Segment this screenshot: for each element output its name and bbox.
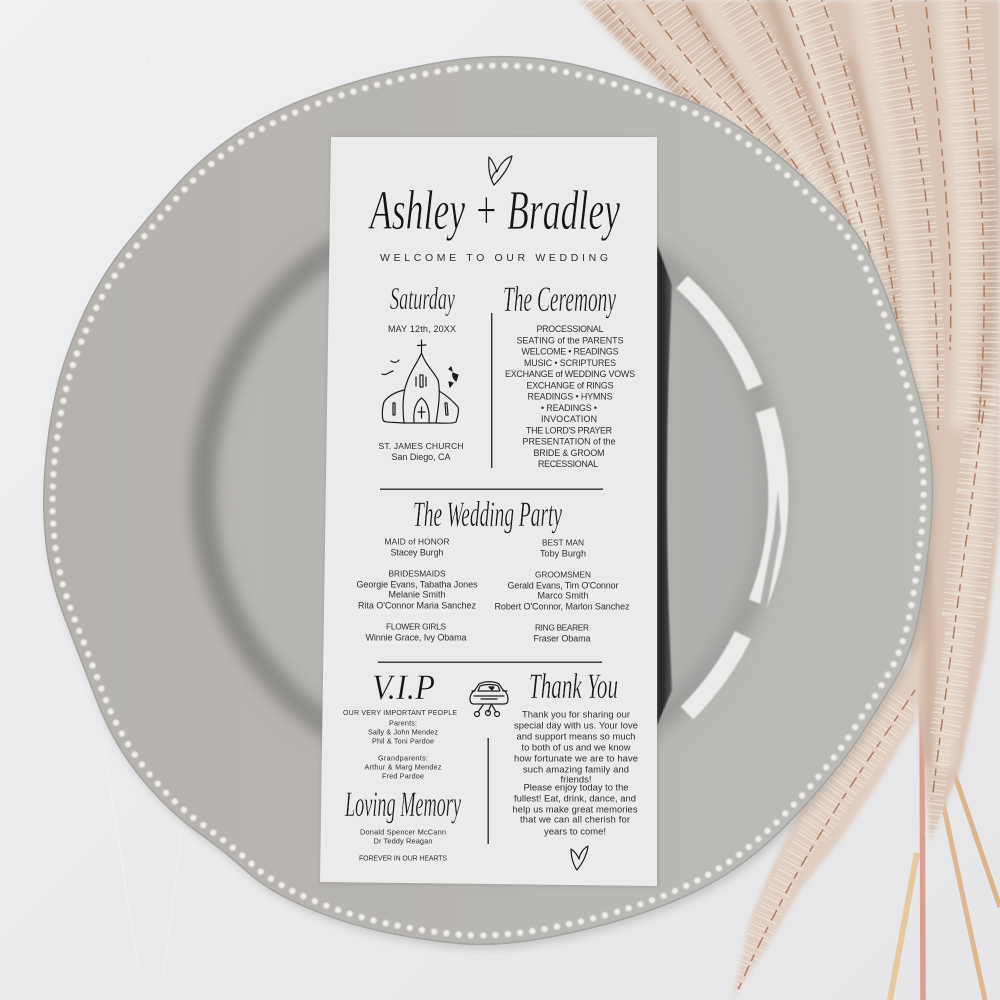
bride's party: FLOWER GIRLS bbox=[386, 622, 446, 632]
panel: date and venue: San Diego, CA bbox=[392, 452, 450, 462]
groom's party: BEST MAN bbox=[542, 538, 584, 548]
icon: wedding car bbox=[470, 682, 508, 716]
ceremony order list: MUSIC • SCRIPTURES bbox=[524, 358, 616, 368]
VIP names: Sally & John Mendez bbox=[368, 728, 438, 736]
vertical divider bbox=[488, 738, 489, 844]
lower plume bbox=[732, 640, 925, 1000]
thank you message: help us make great memories bbox=[512, 803, 638, 814]
reflection slit bbox=[760, 490, 781, 607]
bride's party: Melanie Smith bbox=[388, 590, 446, 600]
ceremony order list: EXCHANGE of RINGS bbox=[526, 380, 614, 390]
panel: the wedding party bbox=[356, 494, 630, 644]
heading: Saturday: Saturday bbox=[390, 280, 455, 316]
heading: V.I.P: V.I.P bbox=[372, 667, 435, 707]
ceremony order list: BRIDE & GROOM bbox=[534, 448, 604, 458]
ceremony order list: RECESSIONAL bbox=[538, 459, 598, 469]
groom's party bbox=[494, 538, 630, 644]
groom's party: RING BEARER bbox=[535, 622, 589, 632]
pampas soft mass bbox=[578, 0, 1000, 842]
thank you message: friends! bbox=[560, 773, 592, 784]
pampas creases bbox=[600, 0, 992, 760]
reflection on plate bbox=[682, 282, 778, 713]
bride's party: Stacey Burgh bbox=[390, 548, 444, 558]
heading: Thank You: Thank You bbox=[529, 666, 618, 706]
VIP names: Grandparents: bbox=[378, 754, 428, 762]
heading: The Ceremony: The Ceremony bbox=[503, 279, 616, 319]
VIP subtitle: OUR VERY IMPORTANT PEOPLE bbox=[343, 710, 457, 717]
VIP names: Parents: bbox=[389, 718, 417, 728]
thank you message bbox=[512, 708, 638, 836]
bride's party: Georgie Evans, Tabatha Jones bbox=[356, 580, 478, 590]
title: couple names: Ashley + Bradley bbox=[367, 180, 620, 242]
program card bbox=[320, 137, 657, 886]
thank you message: such amazing family and bbox=[523, 763, 629, 774]
horizontal divider bbox=[378, 662, 602, 663]
ceremony order list: PROCESSIONAL bbox=[536, 324, 604, 334]
ceremony order list bbox=[505, 324, 635, 469]
ceremony order list: • READINGS • bbox=[541, 403, 597, 413]
ceremony order list: THE LORD'S PRAYER bbox=[526, 425, 612, 435]
VIP names: Arthur & Marg Mendez bbox=[364, 762, 442, 772]
bride's party: MAID of HONOR bbox=[384, 536, 450, 546]
memorial names: Donald Spencer McCann bbox=[360, 828, 446, 837]
groom's party: Fraser Obama bbox=[534, 634, 590, 644]
memorial names: FOREVER IN OUR HEARTS bbox=[359, 856, 447, 863]
groom's party: Gerald Evans, Tim O'Connor bbox=[508, 580, 618, 590]
bride's party bbox=[356, 536, 478, 642]
plate rim bbox=[44, 57, 932, 944]
venue: ST. JAMES CHURCH bbox=[378, 441, 464, 451]
ceremony order list: PRESENTATION of the bbox=[522, 437, 616, 447]
plate beaded edge bbox=[53, 66, 924, 935]
thank you message: Thank you for sharing our bbox=[522, 708, 630, 719]
plate well bbox=[201, 202, 777, 778]
date: MAY 12th, 20XX bbox=[388, 324, 456, 334]
thank you message: how fortunate we are to have bbox=[514, 752, 638, 763]
thank you message: and support means so much bbox=[516, 730, 636, 741]
VIP names bbox=[364, 718, 442, 780]
card shadow on plate bbox=[657, 245, 672, 725]
panel: date and venue bbox=[378, 280, 464, 462]
bride's party: Rita O'Connor Maria Sanchez bbox=[358, 600, 476, 610]
pampas light bands bbox=[625, 0, 985, 760]
thank you message: special day with us. Your love bbox=[514, 719, 638, 730]
thank you message: to both of us and we know bbox=[522, 741, 631, 752]
memorial names: Dr Teddy Reagan bbox=[374, 837, 432, 846]
panel: the ceremony bbox=[503, 279, 635, 469]
panel: VIP bbox=[343, 667, 457, 780]
plate bbox=[44, 57, 932, 944]
thank you message: that we can all cherish for bbox=[520, 813, 630, 824]
ceremony order list: WELCOME • READINGS bbox=[522, 347, 619, 357]
ceremony order list: READINGS • HYMNS bbox=[528, 392, 613, 402]
icon: bottom heart bbox=[571, 846, 588, 870]
thank you message: fullest! Eat, drink, dance, and bbox=[514, 792, 636, 803]
card paper bbox=[320, 137, 657, 886]
pampas grass bbox=[578, 0, 1000, 1000]
pampas stems bbox=[890, 690, 1000, 1000]
groom's party: Marco Smith bbox=[538, 590, 588, 600]
thank you message: years to come! bbox=[544, 825, 606, 836]
icon: church bbox=[382, 340, 458, 423]
heading: Loving Memory: Loving Memory bbox=[344, 784, 461, 824]
ceremony order list: SEATING of the PARENTS bbox=[516, 335, 624, 345]
ceremony order list: INVOCATION bbox=[541, 414, 597, 424]
vertical divider bbox=[491, 313, 492, 468]
horizontal divider bbox=[380, 488, 603, 490]
groom's party: Robert O'Connor, Marlon Sanchez bbox=[494, 602, 630, 612]
thank you message: Please enjoy today to the bbox=[524, 781, 628, 792]
well shadow ring bbox=[203, 204, 775, 776]
plate drop shadow bbox=[47, 62, 935, 949]
ceremony order list: EXCHANGE of WEDDING VOWS bbox=[505, 369, 635, 379]
icon: top heart bbox=[489, 156, 512, 185]
panel: loving memory bbox=[344, 784, 461, 863]
pampas plumes bbox=[590, 0, 990, 995]
VIP names: Phil & Toni Pardoe bbox=[372, 736, 434, 746]
heading: The Wedding Party: The Wedding Party bbox=[413, 494, 562, 534]
VIP names: Fred Pardoe bbox=[382, 772, 424, 780]
bride's party: Winnie Grace, Ivy Obama bbox=[366, 632, 466, 642]
groom's party: Toby Burgh bbox=[540, 548, 586, 558]
groom's party: GROOMSMEN bbox=[535, 570, 591, 580]
memorial names bbox=[359, 828, 447, 863]
bride's party: BRIDESMAIDS bbox=[388, 568, 446, 578]
panel: thank you bbox=[512, 666, 638, 836]
subtitle: WELCOME TO OUR WEDDING bbox=[380, 252, 608, 264]
card soft shadow bbox=[320, 137, 659, 887]
